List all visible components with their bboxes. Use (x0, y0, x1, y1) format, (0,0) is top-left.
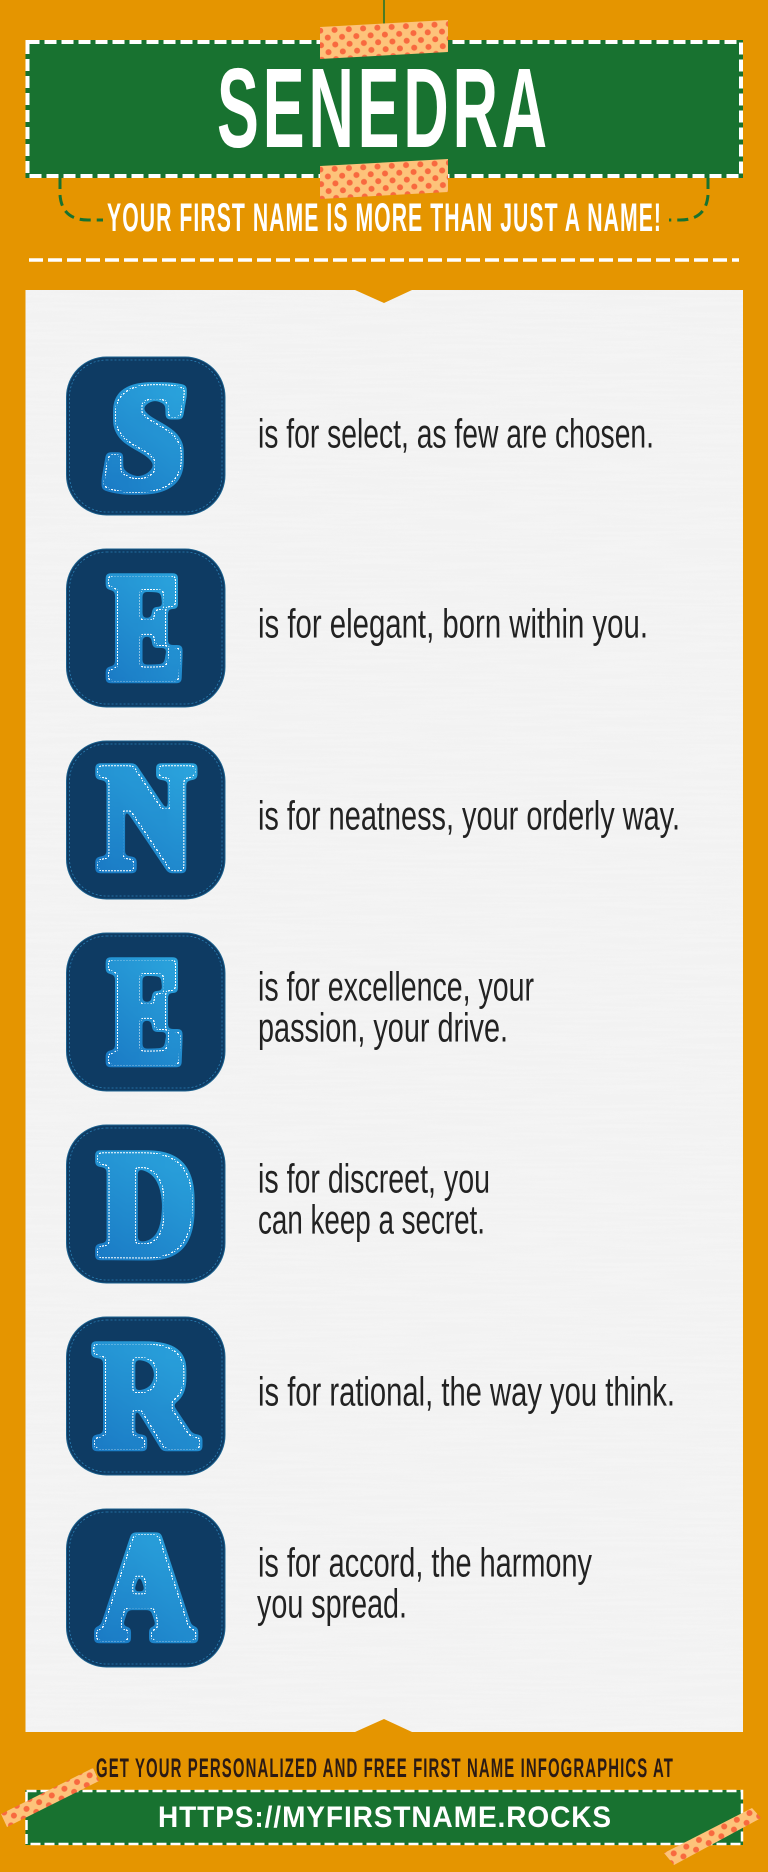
icon: letter N: N (98, 733, 194, 901)
icon: letter S: S (104, 353, 188, 521)
icon: letter A (66, 1503, 225, 1671)
top notch (355, 290, 412, 303)
panel: letters (26, 290, 743, 1732)
icon: letter R (66, 1311, 225, 1479)
icon: letter E second (66, 927, 225, 1095)
text: D: can keep a secret. (258, 1196, 485, 1242)
connector: left (60, 178, 103, 220)
title banner (26, 0, 743, 199)
icon: letter A: A (98, 1503, 194, 1671)
hanging string (383, 0, 385, 24)
icon: letter N (66, 733, 225, 901)
icon: letter D: D (98, 1120, 196, 1288)
row: E (66, 543, 648, 711)
row: S (66, 353, 654, 521)
banner stitched border (28, 42, 741, 176)
text: D: is for discreet, you (258, 1156, 490, 1202)
url: HTTPS://MYFIRSTNAME.ROCKS (158, 1801, 612, 1834)
icon: letter S (66, 353, 225, 521)
text: E second (258, 964, 534, 1050)
tape: top (320, 20, 448, 59)
text: D (258, 1156, 490, 1242)
icon: letter E: E (109, 543, 183, 711)
text: A: you spread. (257, 1580, 407, 1626)
text: A (257, 1540, 592, 1626)
text: E second: is for excellence, your (258, 964, 534, 1010)
tape: right (664, 1808, 761, 1865)
row: D (66, 1120, 490, 1288)
footer banner (1, 1768, 761, 1865)
strip stitched border (26, 1791, 742, 1844)
row: R (66, 1311, 675, 1479)
panel background (26, 290, 743, 1732)
icon: letter E second: E (109, 927, 183, 1095)
text: E second: passion, your drive. (258, 1004, 508, 1050)
icon: letter E (66, 543, 225, 711)
green strip (26, 1790, 743, 1845)
row: A (66, 1503, 592, 1671)
icon: letter D (66, 1120, 225, 1288)
row: N (66, 733, 680, 901)
text: A: is for accord, the harmony (258, 1540, 592, 1586)
tape: bottom (320, 159, 448, 199)
row: E second (66, 927, 534, 1095)
tape: left (1, 1768, 99, 1827)
bottom notch (355, 1719, 412, 1732)
green banner (26, 40, 743, 178)
icon: letter R: R (94, 1311, 198, 1479)
connector: right (669, 178, 708, 220)
